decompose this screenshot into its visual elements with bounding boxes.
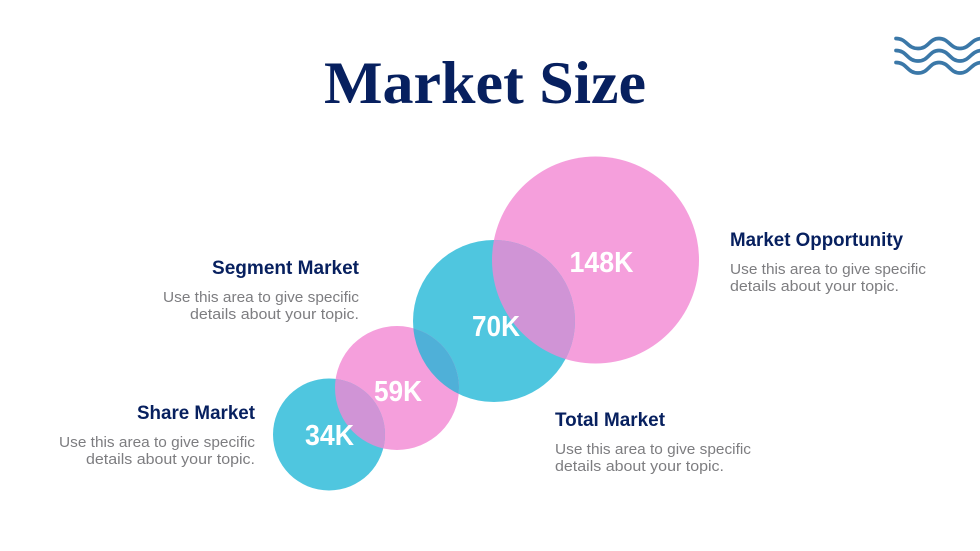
circle: share market [273,378,385,490]
circle: segment market [335,326,459,450]
icon: waves [896,38,980,73]
label: total market: Use this area to give specific [555,441,752,458]
label: segment market: Use this area to give specific [163,289,360,306]
circle: total market [413,240,575,402]
label: total market: details about your topic. [555,458,724,475]
label: total market: Total Market [555,410,666,431]
label: market opportunity: Use this area to give specific [730,261,927,278]
label: segment market [163,258,360,323]
label: segment market: Segment Market [212,258,360,279]
title: Market Size [324,50,646,116]
label: share market: details about your topic. [86,451,255,468]
label: market opportunity [730,230,927,295]
label: share market [59,403,256,468]
value: 70K: 70K [472,311,520,343]
label: share market: Use this area to give specific [59,434,256,451]
bubble chart [273,156,699,490]
label: total market [555,410,752,475]
circle: market opportunity [492,156,699,364]
overlap: share and segment [335,379,385,448]
label: market opportunity: Market Opportunity [730,230,903,251]
label: segment market: details about your topic. [190,306,359,323]
label: share market: Share Market [137,403,256,424]
overlap: total and opportunity [492,240,575,359]
value: 34K: 34K [305,420,354,452]
value: 59K: 59K [374,376,422,408]
value: 148K: 148K [570,247,634,279]
label: market opportunity: details about your topic. [730,278,899,295]
overlap: segment and total [413,328,459,394]
